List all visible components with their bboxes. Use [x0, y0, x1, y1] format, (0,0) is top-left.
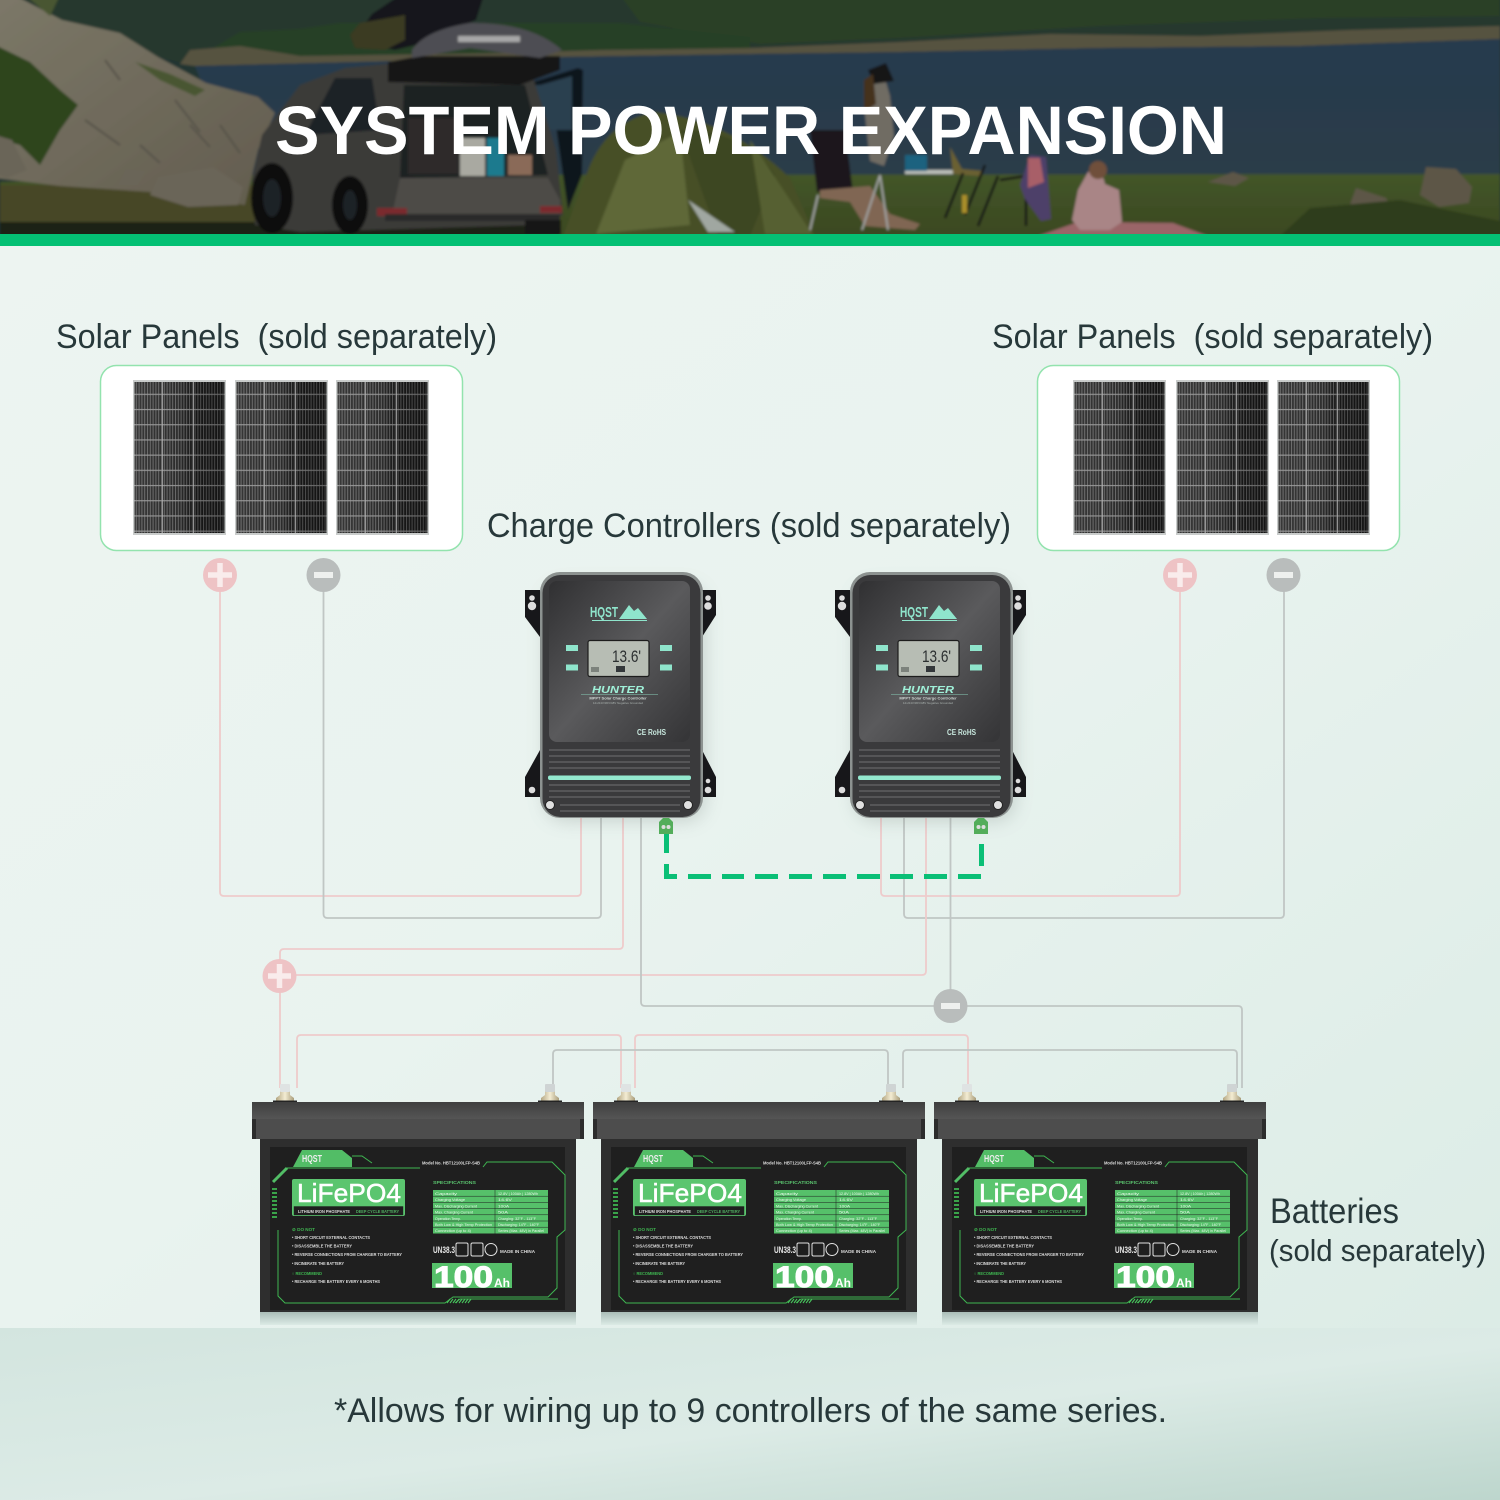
wire: left solar negative to controller 1: [324, 590, 601, 918]
battery 1: • INCINERATE THE BATTERY: [292, 1261, 344, 1266]
battery 1: ○ RECOMMEND: [292, 1271, 323, 1276]
green dashed communication cable: [664, 832, 984, 879]
battery 3: Discharging: 14°F - 140°F: [1180, 1222, 1222, 1227]
charge controller 2: [835, 572, 1026, 834]
battery 2: 14.6V: [839, 1197, 854, 1202]
battery 3: Charging: 32°F - 113°F: [1180, 1216, 1219, 1221]
battery 2: Connection (up to 4): [776, 1228, 813, 1233]
charge controller 1: [525, 572, 716, 834]
hills behind the lake: [0, 0, 1500, 65]
charge controller 1: MPPT Solar Charge Controller: [589, 696, 647, 700]
battery 2: Series (Max. 48V) in Parallel: [839, 1228, 885, 1233]
charge controller 2: MPPT Solar Charge Controller: [899, 696, 957, 700]
towel: [1020, 155, 1051, 221]
battery 2: Max. Charging Current: [776, 1210, 815, 1215]
battery 3: ○ RECOMMEND: [974, 1271, 1005, 1276]
battery 1: Capacity: [435, 1191, 457, 1196]
header photo: camping by the lake: [0, 0, 1500, 240]
battery 3: • SHORT CIRCUIT EXTERNAL CONTACTS: [974, 1235, 1052, 1240]
wire: right solar negative to controller 2: [904, 590, 1284, 918]
icon: right solar negative: [1266, 558, 1300, 592]
battery 3: Model No. HBT12100LFP-S4B: [1104, 1160, 1163, 1166]
battery 1: Series (Max. 48V) in Parallel: [498, 1228, 544, 1233]
battery 2: UN38.3: [774, 1245, 796, 1255]
battery 2: LiFePO4: [638, 1178, 742, 1208]
battery 3: • REVERSE CONNECTIONS FROM CHARGER TO BATTERY: [974, 1252, 1084, 1257]
wheels: [251, 163, 293, 233]
charge controller 1: 12v/24V/36V/48V Negative Grounded: [593, 701, 643, 705]
battery 2: Capacity: [776, 1191, 798, 1196]
battery 2: Max. Discharging Current: [776, 1203, 819, 1208]
battery 2: DEEP CYCLE BATTERY: [697, 1209, 740, 1214]
battery 1: Both Low & High Temp Protection: [435, 1222, 492, 1227]
label: solar panels right: Solar Panels (sold separately): [992, 318, 1433, 356]
battery 1: LiFePO4: [297, 1178, 401, 1208]
charge controller 2: 13.6': [922, 647, 951, 666]
battery 2: 100: [775, 1261, 834, 1294]
title: SYSTEM POWER EXPANSION: [275, 92, 1227, 169]
charge controller 1: 13.6': [612, 647, 641, 666]
battery 2: ⊘ DO NOT: [633, 1227, 656, 1232]
chair and seated woman: [810, 130, 853, 192]
wire: controller 1 battery positive: [280, 818, 623, 1088]
battery 1: HQST: [302, 1154, 322, 1165]
connector: [974, 818, 988, 834]
battery 3: [934, 1084, 1266, 1325]
battery 3: 12.8V | 100Ah | 1280Wh: [1180, 1191, 1220, 1196]
battery 3: HQST: [984, 1154, 1004, 1165]
battery 1: MADE IN CHINA: [500, 1249, 536, 1254]
battery 1: • REVERSE CONNECTIONS FROM CHARGER TO BATTERY: [292, 1252, 402, 1257]
far-right rocks: [1208, 167, 1472, 218]
green bushes: [0, 45, 78, 165]
label: charge controllers: Charge Controllers (sold separately): [487, 507, 1011, 545]
wire: controller 1 battery negative: [641, 818, 1242, 1088]
battery 2: [593, 1084, 925, 1325]
wire: battery positive jumper 1: [297, 1035, 621, 1088]
battery 3: 50A: [1180, 1210, 1191, 1215]
battery 1: Operation Temp.: [435, 1216, 461, 1221]
battery 3: ⊘ DO NOT: [974, 1227, 997, 1232]
charge controller 1: CE RoHS: [637, 728, 667, 737]
battery 1: DEEP CYCLE BATTERY: [356, 1209, 399, 1214]
battery 3: 100: [1116, 1261, 1175, 1294]
battery 3: 100A: [1180, 1203, 1191, 1208]
battery 1: 50A: [498, 1210, 509, 1215]
wire: battery negative jumper 2: [903, 1050, 1237, 1088]
wire: battery positive jumper 2: [635, 1035, 968, 1088]
battery 3: MADE IN CHINA: [1182, 1249, 1218, 1254]
green header rule: [0, 234, 1500, 246]
floor band: [0, 1328, 1500, 1500]
icon: battery positive bus: [262, 959, 296, 993]
panel: left solar array: [100, 366, 462, 550]
battery 2: Operation Temp.: [776, 1216, 802, 1221]
connector: [659, 818, 673, 834]
rock slope: [0, 0, 275, 205]
label: batteries: Batteries: [1270, 1192, 1399, 1231]
battery 1: 12.8V | 100Ah | 1280Wh: [498, 1191, 538, 1196]
battery 3: Series (Max. 48V) in Parallel: [1180, 1228, 1226, 1233]
battery 3: Operation Temp.: [1117, 1216, 1143, 1221]
battery 2: • REVERSE CONNECTIONS FROM CHARGER TO BATTERY: [633, 1252, 743, 1257]
battery 3: Ah: [1176, 1276, 1192, 1290]
battery 2: LITHIUM IRON PHOSPHATE: [639, 1209, 691, 1214]
battery 2: Charging Voltage: [776, 1197, 806, 1202]
battery 1: 100: [434, 1261, 493, 1294]
wire: battery negative jumper 1: [553, 1050, 888, 1088]
battery 1: Charging Voltage: [435, 1197, 465, 1202]
trunk interior: [400, 85, 548, 178]
battery 3: SPECIFICATIONS: [1115, 1180, 1158, 1185]
lake: [195, 39, 1500, 180]
battery 2: HQST: [643, 1154, 663, 1165]
camp table and folding chairs: [905, 170, 960, 174]
battery 3: Connection (up to 4): [1117, 1228, 1154, 1233]
battery 3: • DISASSEMBLE THE BATTERY: [974, 1244, 1034, 1248]
icon: left solar negative: [306, 558, 340, 592]
battery 1: [252, 1084, 584, 1325]
battery 1: • SHORT CIRCUIT EXTERNAL CONTACTS: [292, 1235, 370, 1240]
battery 3: Max. Charging Current: [1117, 1210, 1156, 1215]
battery 3: LiFePO4: [979, 1178, 1083, 1208]
battery 3: Charging Voltage: [1117, 1197, 1147, 1202]
battery 1: Connection (up to 4): [435, 1228, 472, 1233]
battery 2: Ah: [835, 1276, 851, 1290]
battery 2: • SHORT CIRCUIT EXTERNAL CONTACTS: [633, 1235, 711, 1240]
battery 1: UN38.3: [433, 1245, 455, 1255]
battery 1: Max. Charging Current: [435, 1210, 474, 1215]
battery 3: 14.6V: [1180, 1197, 1195, 1202]
label: batteries: [1269, 1192, 1486, 1268]
footnote: *Allows for wiring up to 9 controllers of the same series.: [334, 1392, 1167, 1430]
charge controller 1: HUNTER: [592, 684, 644, 696]
battery 2: Discharging: 14°F - 140°F: [839, 1222, 881, 1227]
battery 3: • RECHARGE THE BATTERY EVERY 6 MONTHS: [974, 1279, 1062, 1284]
battery 2: Both Low & High Temp Protection: [776, 1222, 833, 1227]
charge controller 2: HQST: [900, 604, 928, 621]
battery 3: • INCINERATE THE BATTERY: [974, 1261, 1026, 1266]
battery 2: • RECHARGE THE BATTERY EVERY 6 MONTHS: [633, 1279, 721, 1284]
girl on blanket: [1038, 222, 1208, 236]
tent: [563, 112, 815, 236]
battery 1: • DISASSEMBLE THE BATTERY: [292, 1244, 352, 1248]
battery 3: LITHIUM IRON PHOSPHATE: [980, 1209, 1032, 1214]
battery 1: 100A: [498, 1203, 509, 1208]
battery 2: • INCINERATE THE BATTERY: [633, 1261, 685, 1266]
battery 3: Capacity: [1117, 1191, 1139, 1196]
wire: controller 2 battery positive: [280, 818, 926, 975]
icon: battery negative bus: [934, 989, 968, 1023]
boulders: [0, 135, 243, 207]
charge controller 2: 12v/24V/36V/48V Negative Grounded: [903, 701, 953, 705]
battery 1: Charging: 32°F - 113°F: [498, 1216, 537, 1221]
battery 1: ⊘ DO NOT: [292, 1227, 315, 1232]
grass: [0, 174, 1500, 240]
wire: right solar positive to controller 2: [881, 590, 1180, 896]
icon: right solar positive: [1163, 558, 1197, 592]
battery 3: Max. Discharging Current: [1117, 1203, 1160, 1208]
wiring: [220, 590, 1284, 1088]
far shoreline: [180, 26, 1500, 66]
battery 1: Ah: [494, 1276, 510, 1290]
battery 2: 100A: [839, 1203, 850, 1208]
panel: right solar array: [1038, 366, 1400, 550]
icon: left solar positive: [203, 558, 237, 592]
label: batteries: (sold separately): [1269, 1233, 1486, 1268]
battery 2: 50A: [839, 1210, 850, 1215]
car body: [252, 62, 563, 232]
battery 2: MADE IN CHINA: [841, 1249, 877, 1254]
label: solar panels left: Solar Panels (sold separately): [56, 318, 497, 356]
battery 2: ○ RECOMMEND: [633, 1271, 664, 1276]
battery 1: 14.6V: [498, 1197, 513, 1202]
tailgate: [412, 23, 562, 58]
page background: [0, 240, 1500, 1330]
battery 1: Discharging: 14°F - 140°F: [498, 1222, 540, 1227]
roof box: [352, 0, 484, 50]
battery 2: • DISASSEMBLE THE BATTERY: [633, 1244, 693, 1248]
battery 2: Model No. HBT12100LFP-S4B: [763, 1160, 822, 1166]
battery 1: Model No. HBT12100LFP-S4B: [422, 1160, 481, 1166]
battery 1: SPECIFICATIONS: [433, 1180, 476, 1185]
charge controller 1: HQST: [590, 604, 618, 621]
wire: controller 2 battery negative: [950, 818, 952, 1006]
battery 1: LITHIUM IRON PHOSPHATE: [298, 1209, 350, 1214]
wire: left solar positive to controller 1: [220, 590, 581, 896]
battery 3: DEEP CYCLE BATTERY: [1038, 1209, 1081, 1214]
battery 1: Max. Discharging Current: [435, 1203, 478, 1208]
standing woman: [864, 82, 894, 166]
battery 3: Both Low & High Temp Protection: [1117, 1222, 1174, 1227]
battery 1: • RECHARGE THE BATTERY EVERY 6 MONTHS: [292, 1279, 380, 1284]
battery 2: SPECIFICATIONS: [774, 1180, 817, 1185]
battery 3: UN38.3: [1115, 1245, 1137, 1255]
rear door: [523, 68, 583, 210]
charge controller 2: HUNTER: [902, 684, 954, 696]
charge controller 2: CE RoHS: [947, 728, 977, 737]
battery 2: 12.8V | 100Ah | 1280Wh: [839, 1191, 879, 1196]
battery 2: Charging: 32°F - 113°F: [839, 1216, 878, 1221]
